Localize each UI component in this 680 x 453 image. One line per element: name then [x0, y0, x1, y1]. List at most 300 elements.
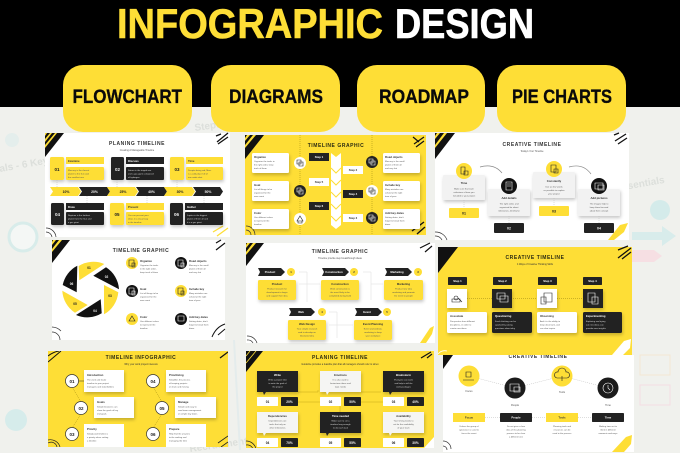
card dependencies: 70% — [286, 441, 293, 445]
card availability — [383, 412, 424, 447]
background collage — [0, 105, 680, 453]
subtitle: Today's Your Timeline — [520, 150, 544, 153]
arrow band percentages: 30% — [177, 190, 183, 194]
legend item: color: to represent the — [140, 324, 156, 326]
legend item: add key dates: Add key dates — [189, 315, 208, 319]
milestone 04: planet from the Sun and — [68, 218, 92, 220]
card emotions: 02 — [329, 400, 332, 404]
stage 5 event: Event Planning — [363, 322, 383, 326]
step 3 — [533, 161, 575, 216]
left cards: Color — [254, 211, 262, 215]
item 05 — [156, 397, 216, 418]
stage 1 product: 1 — [290, 270, 292, 274]
stage 2 construction — [321, 268, 359, 300]
legend item: include key: Many mistakes are — [189, 292, 208, 295]
legend item: road objects: planet of them all — [189, 268, 206, 270]
card write: the project — [272, 386, 283, 388]
step 2: organised for about — [500, 206, 519, 209]
item 02 — [74, 397, 134, 418]
card brainstorm: 40% — [412, 400, 419, 404]
item 05: Manage — [178, 400, 189, 404]
milestone 05: Present — [128, 205, 138, 209]
milestone 04 — [51, 203, 104, 225]
step 3: Constantly — [547, 179, 562, 183]
node time — [598, 378, 618, 407]
left cards: timeline — [254, 223, 262, 226]
pill: diagrams — [211, 65, 340, 132]
item 05: 05 — [159, 406, 165, 411]
milestone 02: Saturn is the ringed one — [128, 169, 152, 172]
milestone 06: planet of them all and — [187, 218, 209, 220]
step 3: Use as few words — [545, 186, 564, 188]
step 2: milestones, timeframe — [498, 210, 520, 212]
stage 2 construction: 2 — [353, 270, 355, 274]
step 2: The right order, and — [499, 202, 519, 206]
descriptions: moments and ways — [599, 432, 618, 435]
node people — [504, 378, 526, 407]
pie chart: 01 — [87, 266, 91, 270]
right cards: down — [385, 224, 391, 226]
panel: timeline infographic — [48, 351, 228, 447]
milestone 05 — [110, 203, 164, 225]
item 03: a timeline — [87, 440, 97, 442]
step 1: Perspective from different — [450, 320, 475, 323]
descriptions: focus the event — [462, 432, 477, 435]
card emotions: 50% — [349, 400, 356, 404]
card availability: 30% — [412, 441, 419, 445]
milestone 04: Neptune is the farthest — [68, 214, 90, 217]
milestone 04: 04 — [55, 212, 60, 217]
milestone 06 — [170, 203, 223, 225]
step 4 — [583, 277, 622, 333]
step 3: as possible to explain — [544, 189, 565, 192]
legend item: road objects: Road objects — [189, 259, 207, 263]
heading: TIMELINE GRAPHIC — [312, 249, 368, 255]
right cards: Many mistakes are — [385, 188, 404, 191]
pie chart: 03 — [108, 294, 112, 298]
step 4: The images help to — [590, 202, 609, 206]
step 3: 03 — [552, 210, 556, 214]
item 01 — [66, 370, 124, 392]
pill: pie charts — [497, 65, 626, 132]
right cards: time of year — [385, 195, 397, 198]
pill: pie charts: PIE CHARTS — [512, 87, 612, 108]
card time needed: 55% — [349, 441, 356, 445]
right cards: and very hot — [385, 167, 397, 170]
card dependencies — [257, 412, 298, 447]
right cards — [383, 153, 420, 229]
panel: planing timeline — [45, 133, 230, 237]
descriptions: used in the process — [553, 432, 572, 435]
milestone 05: You can present your — [128, 214, 149, 217]
descriptions — [459, 425, 618, 438]
step 2: sparked by asking — [495, 324, 513, 326]
label row: People — [511, 416, 521, 420]
legend item: road objects — [175, 257, 209, 274]
left cards: Organize the tasks in — [254, 160, 275, 163]
card write — [257, 371, 298, 406]
card time needed — [320, 412, 361, 447]
stage 4 web: illustrated idea — [300, 334, 315, 338]
node focus: Focus — [465, 389, 473, 393]
item 06: Help find the answers — [169, 432, 191, 436]
card emotions: brainstorm ideas and — [330, 382, 351, 385]
card emotions: Emotions — [334, 373, 347, 377]
subtitle: Timeline provide step breakthrough ideas — [318, 257, 363, 260]
step 4: Step 4 — [588, 279, 597, 283]
label row: Focus — [465, 416, 474, 420]
milestone 01: planet to the Sun and — [68, 172, 90, 176]
legend item: add key dates: Setting dates, don't — [189, 320, 208, 323]
milestone 01: Mercury is the closest — [68, 169, 90, 172]
milestone 03: 03 — [174, 167, 180, 172]
left cards: track of them — [254, 167, 267, 170]
step 1 — [443, 163, 485, 218]
item 02: Goals — [97, 400, 105, 404]
card time needed: Time needed — [332, 414, 349, 418]
step 4: Experimenting — [586, 314, 606, 318]
stage 1 product: development to begin — [267, 291, 288, 294]
left cards: to represent the — [254, 220, 270, 222]
item 02: Simple browsers can — [97, 406, 118, 408]
stage 4 web: Web Design — [299, 322, 315, 326]
step 1: create new ideas — [450, 327, 467, 330]
panel: planing timeline percentages — [246, 351, 434, 449]
card availability: Your timing needs to — [394, 420, 414, 422]
step 3: keep observant, and — [540, 324, 561, 326]
heading: TIMELINE GRAPHIC — [113, 248, 169, 254]
legend item: goal: Goal — [140, 287, 146, 291]
left cards: organised for the — [254, 192, 271, 194]
step 2: questions about why — [495, 327, 516, 330]
descriptions: idea of this planning — [506, 428, 527, 432]
panel: creative timeline circles — [443, 354, 634, 452]
left cards: Use different colors — [254, 216, 274, 219]
milestone 03: is a cold place full of — [188, 174, 208, 176]
card dependencies: Dependencies are — [269, 420, 287, 422]
card time needed: to do each task — [333, 426, 349, 430]
left icons — [294, 157, 306, 225]
pill: flowchart: FLOWCHART — [72, 87, 182, 108]
item 04 — [146, 370, 206, 392]
milestone 02: 02 — [115, 167, 120, 172]
milestone 06: Gather — [187, 205, 197, 209]
right cards: solved at the right — [385, 192, 403, 194]
milestone 05: in the timeline — [128, 221, 142, 224]
header band — [0, 0, 680, 107]
pie chart: 06 — [70, 282, 73, 286]
left cards: the right order, keep — [254, 164, 274, 166]
item 01: timeline to your project — [87, 382, 109, 385]
card brainstorm: and help to tell the — [395, 382, 413, 385]
stage 2 construction: the most likely to be — [330, 291, 350, 294]
legend item: goal — [126, 285, 159, 302]
milestone 02 — [111, 157, 164, 180]
step 2: Questioning — [495, 314, 512, 318]
pie chart: 04 — [93, 309, 97, 313]
card availability: Availability — [396, 414, 411, 418]
arrow band percentages: 25% — [120, 190, 126, 194]
stage 1 product: Product — [265, 270, 275, 274]
stage 4 web: Web — [298, 310, 304, 314]
right cards: planet of them all — [385, 164, 402, 166]
card time needed: Make sure to set a — [332, 420, 350, 422]
pie chart — [62, 262, 119, 317]
item 03: a priority when setting — [87, 436, 109, 439]
arrow band percentages: 10% — [63, 190, 69, 194]
stage 2 construction: completed during build — [329, 294, 352, 298]
connectors — [469, 376, 608, 388]
descriptions: Unless the group of — [460, 425, 479, 428]
legend item: organize — [126, 257, 159, 274]
label row: Time — [605, 416, 612, 420]
item 04: of keeping projects — [169, 382, 188, 385]
title: INFOGRAPHIC — [117, 0, 383, 47]
card availability: 06 — [392, 441, 395, 445]
stage 1 product — [258, 268, 296, 300]
legend item: organize: in the right order, — [140, 268, 157, 270]
step 1: milestone of time you — [454, 191, 475, 194]
stage 4 web: Your simple research — [297, 328, 318, 330]
milestone 02: Discuss — [128, 159, 139, 163]
descriptions: process to be clear — [507, 432, 526, 435]
step 2: Add details — [501, 196, 517, 200]
milestone 06: 06 — [174, 212, 179, 217]
pill: roadmap — [357, 65, 485, 132]
descriptions: Making time out to — [599, 425, 618, 428]
item 01: The work and make — [87, 378, 107, 382]
right cards: forget to break them — [385, 220, 405, 222]
milestone 03: Time — [188, 159, 195, 163]
subtitle: Why your work project interests — [124, 363, 158, 366]
item 05: on simple key dates — [178, 412, 198, 416]
milestone 01 — [50, 157, 104, 180]
item 03: Priority — [87, 427, 97, 431]
legend item: goal: organised for the — [140, 296, 157, 298]
descriptions: a different one — [509, 436, 524, 438]
item 05: read team management — [178, 409, 202, 412]
milestone 01: Examine — [68, 159, 80, 163]
label row — [453, 413, 624, 422]
node tools: Tools — [559, 390, 566, 394]
node people: People — [511, 403, 520, 407]
stage 4 web — [288, 308, 326, 340]
stage 5 event: Event and website, — [364, 328, 383, 330]
step 2 — [492, 277, 532, 333]
stage 5 event: 5 — [386, 310, 388, 314]
card dependencies: tasks that rely on — [269, 423, 287, 426]
label row: Tools — [558, 416, 566, 420]
node tools — [552, 366, 572, 394]
milestone 03 — [170, 157, 223, 180]
arrows — [480, 166, 591, 174]
item 03: Simply and timeline is — [87, 432, 109, 436]
step labels — [309, 153, 363, 222]
stage 2 construction: Construction — [331, 282, 349, 286]
item 04: 04 — [150, 379, 156, 384]
step 1: Make sure that each — [454, 188, 475, 190]
descriptions: resources can be — [554, 428, 571, 432]
panel: timeline graphic flow — [246, 243, 435, 343]
card time needed: timeline long enough — [330, 423, 351, 426]
heading: PLANING TIMELINE — [312, 355, 368, 361]
legend item: add key dates — [175, 313, 209, 330]
node focus — [458, 366, 480, 393]
legend item: add key dates: forget to break them — [189, 324, 209, 326]
right cards: Setting dates, don't — [385, 216, 404, 219]
heading: TIMELINE GRAPHIC — [308, 143, 364, 149]
legend item: include key: solved at the right — [189, 296, 207, 298]
step 1: disciplines, in order to — [450, 324, 472, 326]
step 4: Exploring and trying — [586, 320, 606, 323]
item 02: show the goals of key — [97, 409, 119, 412]
title: DESIGN — [395, 0, 534, 47]
step labels: Step 3 — [349, 216, 358, 220]
step labels: Step 2 — [349, 168, 358, 172]
heading: PLANING TIMELINE — [109, 141, 165, 147]
right icons — [366, 156, 378, 224]
step 4: provide new insights — [586, 327, 607, 330]
card dependencies: 04 — [266, 441, 269, 445]
arrow band percentages: 20% — [91, 190, 98, 194]
stage 4 web: 4 — [321, 310, 323, 314]
step 4: 04 — [597, 226, 601, 230]
connectors — [299, 272, 383, 338]
left cards: Goal — [254, 183, 260, 187]
stage 5 event: Event — [363, 310, 371, 314]
legend item: include key: time of year — [189, 299, 201, 302]
stage 3 marketing: Product new idea — [395, 288, 413, 290]
stage 1 product: Product research for — [267, 288, 287, 290]
legend item: organize: Organize the tasks — [140, 264, 159, 267]
step 1: Associate — [450, 314, 464, 318]
step 2: 02 — [507, 226, 511, 230]
panel: creative timeline steps — [438, 246, 632, 355]
step 2: Step 2 — [498, 279, 507, 283]
card write: Write — [274, 373, 281, 377]
right cards: Mercury is the small — [385, 160, 405, 163]
heading: TIMELINE INFOGRAPHIC — [106, 355, 176, 361]
descriptions: Planning tools and — [553, 425, 572, 428]
legend item: add key dates: down — [189, 328, 195, 330]
subtitle: Guideline provides a feasible plan that all managers should refer to when — [301, 363, 379, 366]
card emotions: It is also used to — [333, 378, 349, 382]
step 4: keep them focused — [590, 206, 609, 209]
milestone 04: Draw — [68, 205, 76, 209]
step 4: about their concept — [590, 210, 609, 212]
step 1 — [447, 277, 487, 333]
milestone 01: 01 — [54, 167, 60, 172]
background collage: als - 6 Key S — [0, 154, 59, 175]
milestone 06: it is a gas giant — [187, 221, 202, 224]
right cards: Road objects — [385, 155, 403, 159]
item 06: to the making and — [169, 436, 187, 439]
step 1: 01 — [462, 212, 466, 216]
card time needed: 05 — [329, 441, 332, 445]
item 03: 03 — [69, 432, 75, 437]
card brainstorm: Everyone can work — [394, 378, 414, 382]
stage 2 construction: Work construction is — [330, 288, 351, 290]
descriptions: Do not give a clear — [507, 425, 525, 428]
milestone 03: Despite being red, Mars — [188, 169, 212, 172]
stage 4 web: web to develop an — [298, 331, 317, 334]
stage 1 product: and support their idea — [266, 294, 288, 298]
milestone 02: of hydrogen — [128, 176, 140, 179]
card emotions: topic needs — [335, 386, 347, 388]
step 3: Step 3 — [543, 279, 552, 283]
pill: diagrams: DIAGRAMS — [229, 87, 323, 108]
card brainstorm: 03 — [392, 400, 395, 404]
item 06: 06 — [150, 432, 156, 437]
legend item: organize: Organize — [140, 259, 152, 263]
heading: CREATIVE TIMELINE — [509, 354, 568, 360]
item 04: on track and moving — [169, 386, 189, 388]
milestone 05: 05 — [114, 212, 120, 217]
step 4: out new ideas can — [586, 324, 604, 326]
item 01: 01 — [69, 379, 75, 384]
step 3: And it is the ability to — [540, 320, 561, 323]
left cards: Organize — [254, 155, 266, 159]
milestone 06: Jupiter is the biggest — [187, 214, 207, 217]
step 3: Observing — [540, 314, 554, 318]
subtitle: Creating A Manageable Timeline — [120, 149, 155, 152]
step labels: Step 6 — [315, 204, 324, 208]
descriptions: think in different — [600, 428, 616, 432]
step labels: Step 4 — [349, 192, 358, 196]
milestone 04: a gas giant — [68, 221, 79, 224]
arrow band percentages — [50, 187, 223, 196]
card dependencies: Dependencies — [268, 414, 287, 418]
panel: creative timeline numbered — [435, 133, 629, 240]
step 4: Add pictures — [590, 196, 608, 200]
card write: 01 — [266, 400, 269, 404]
item 05: Simple and easy to — [178, 406, 197, 408]
pill: roadmap: ROADMAP — [379, 87, 469, 108]
left cards: List all things to be — [254, 188, 273, 191]
card brainstorm: Brainstorm — [396, 373, 411, 377]
right cards: Add key dates — [385, 211, 404, 215]
stage 3 marketing — [384, 268, 423, 300]
card availability: of your team — [397, 426, 410, 430]
item 04: Simplifies the process — [169, 378, 191, 382]
step 3: can also inspire — [540, 327, 556, 330]
item 02: end goals — [97, 414, 107, 416]
card availability: set for the availability — [393, 423, 415, 426]
heading: CREATIVE TIMELINE — [506, 255, 565, 261]
step labels: Step 1 — [315, 155, 324, 159]
item 06 — [146, 424, 206, 447]
card emotions — [320, 371, 361, 406]
legend item: goal: List all things to be — [140, 292, 159, 295]
step 1: Step 1 — [453, 279, 462, 283]
legend item: organize: keep track of them — [140, 271, 158, 274]
step 2 — [488, 178, 530, 233]
background collage: Steps — [194, 119, 223, 134]
legend item: include key — [175, 285, 208, 302]
legend item: road objects: Mercury is the small — [189, 264, 209, 267]
step 3: your project — [548, 192, 560, 196]
stage 3 marketing: 3 — [417, 270, 419, 274]
step 1: included is your project — [453, 194, 476, 198]
legend item: color: Use different colors — [140, 320, 160, 323]
item 06: Prepare — [169, 427, 180, 431]
descriptions: ignorance is used to — [459, 428, 480, 432]
step 3 — [537, 277, 577, 333]
panel: timeline graphic steps — [245, 135, 426, 235]
milestone 02: and a gas giant composed — [128, 172, 154, 176]
pill: flowchart — [63, 65, 192, 132]
card dependencies: other milestones — [269, 426, 286, 430]
